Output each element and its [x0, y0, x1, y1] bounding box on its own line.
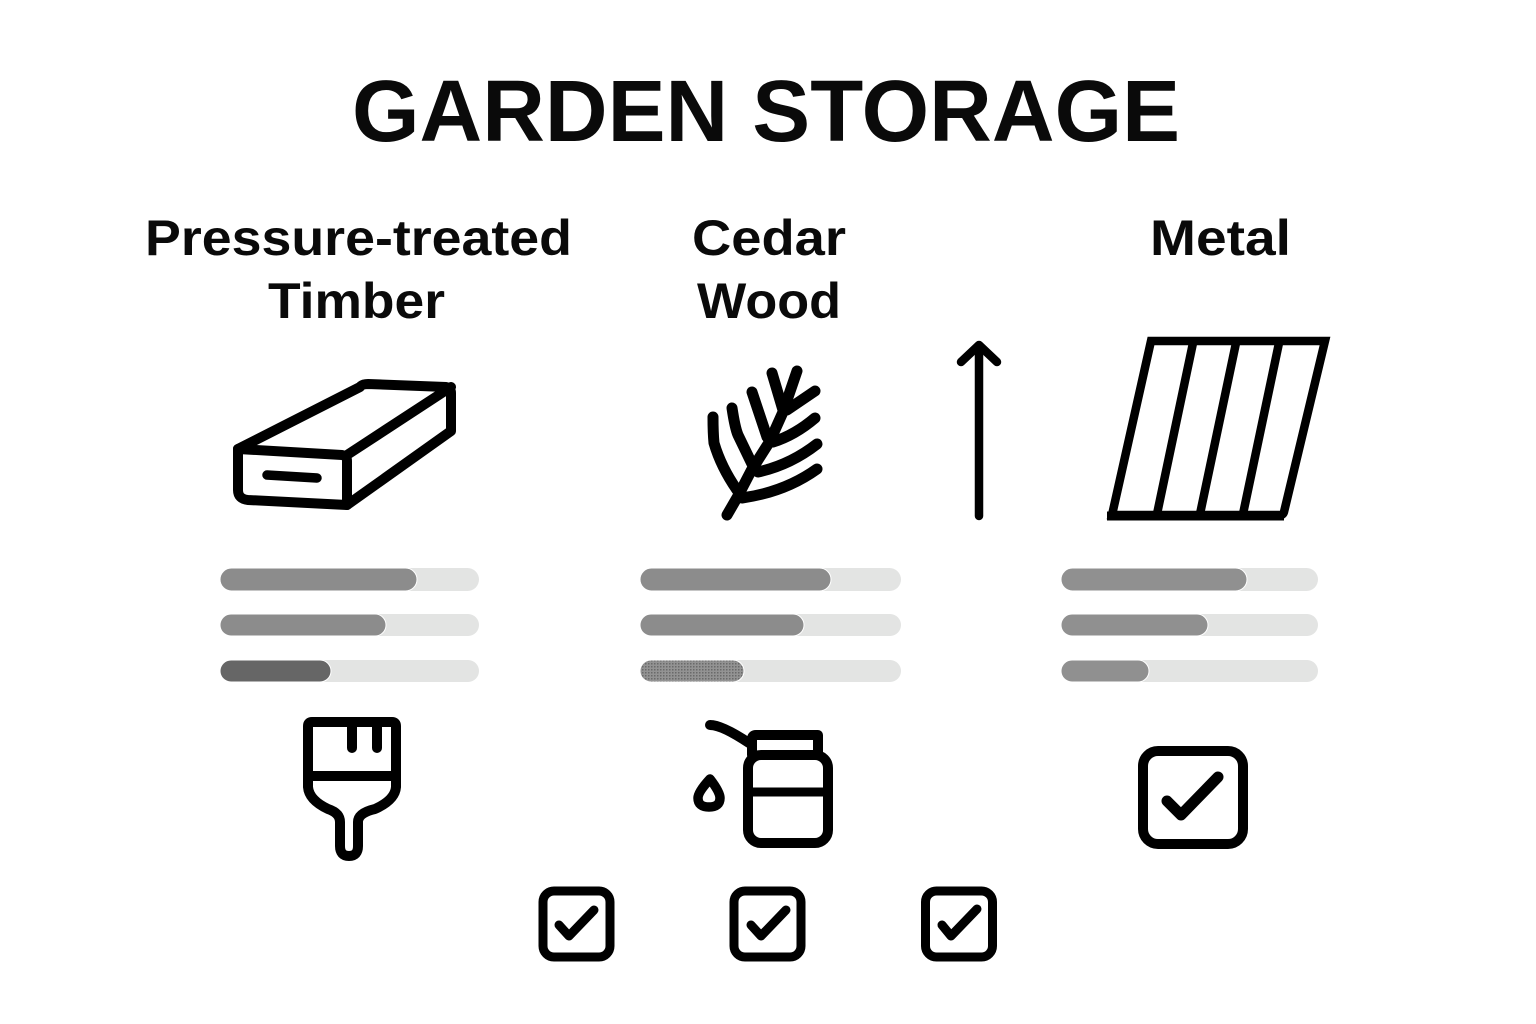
icon: corrugated metal sheet	[1107, 341, 1325, 516]
bars: timber ratings	[220, 568, 479, 682]
heading: cedar wood: Cedar	[692, 210, 846, 266]
heading: pressure-treated timber: Timber	[268, 273, 445, 329]
heading: pressure-treated timber	[145, 210, 572, 329]
panel: metal	[1061, 210, 1325, 844]
bars: cedar ratings	[640, 568, 901, 682]
icon: timber beam	[238, 384, 451, 505]
icon: checkbox 2	[734, 891, 801, 957]
bars: metal ratings	[1061, 568, 1318, 682]
icon: oil jar with drop	[698, 725, 828, 843]
icon: paint brush	[308, 722, 396, 856]
icon: cedar sprig	[713, 371, 817, 515]
checkbox row	[543, 891, 992, 957]
panel: cedar wood	[640, 210, 901, 843]
heading: metal: Metal	[1150, 210, 1291, 266]
arrow: upward	[961, 345, 997, 516]
heading: cedar wood	[692, 210, 846, 329]
icon: large checkbox	[1143, 751, 1243, 844]
panel: pressure-treated timber	[145, 210, 572, 856]
heading: cedar wood: Wood	[697, 273, 841, 329]
heading: pressure-treated timber: Pressure-treated	[145, 210, 572, 266]
icon: checkbox 3	[926, 891, 992, 957]
icon: checkbox 1	[543, 891, 610, 957]
title: GARDEN STORAGE	[352, 63, 1180, 160]
